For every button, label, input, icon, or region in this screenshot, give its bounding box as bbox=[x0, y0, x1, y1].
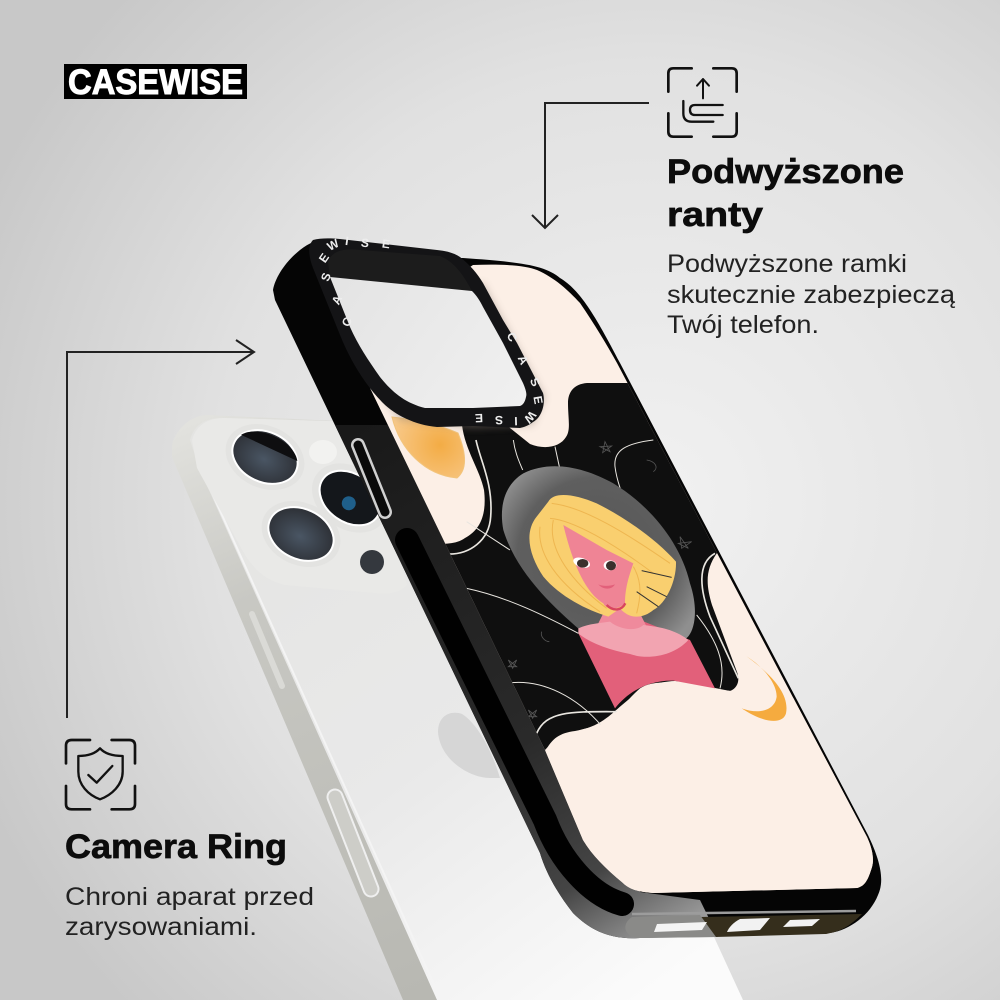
black phone case bbox=[273, 239, 881, 938]
ring lettering: A bbox=[329, 293, 345, 307]
ring lettering: I bbox=[344, 234, 350, 248]
ring shadow bbox=[385, 283, 545, 428]
hair strands bbox=[540, 503, 670, 613]
lower left case wall bbox=[335, 425, 718, 938]
illustrated figure bbox=[447, 440, 873, 907]
icon: shield with check bbox=[66, 740, 135, 809]
ring lettering: E bbox=[381, 237, 391, 251]
lens: bottom bbox=[251, 489, 351, 579]
ring lettering: E bbox=[316, 251, 332, 265]
eyes bbox=[573, 558, 590, 568]
hair bbox=[529, 495, 676, 617]
translucent bottom edge bbox=[625, 915, 716, 938]
ring lettering: S bbox=[360, 236, 370, 250]
text: camera ring description: Chroni aparat przed bbox=[65, 883, 314, 911]
space lines bbox=[447, 440, 738, 733]
volume button bbox=[358, 445, 385, 512]
heading: raised edges: ranty bbox=[667, 196, 763, 234]
port: usb bbox=[727, 918, 770, 932]
ring opening bbox=[330, 277, 526, 408]
ring lettering: W bbox=[325, 236, 342, 254]
lower side button bbox=[335, 797, 371, 889]
text: raised edges description bbox=[667, 250, 955, 339]
torso bbox=[578, 620, 715, 708]
lidar sensor bbox=[360, 550, 384, 574]
arrow: camera ring bbox=[67, 340, 254, 718]
cloud overlay bbox=[545, 682, 873, 907]
side button bbox=[252, 614, 282, 686]
heading: raised edges bbox=[667, 153, 904, 234]
flash bbox=[309, 440, 337, 464]
ring lettering: A bbox=[515, 353, 531, 367]
heading: raised edges: Podwyższone bbox=[667, 153, 904, 191]
text: raised edges description: skutecznie zabezpieczą bbox=[667, 281, 955, 309]
ring lettering: E bbox=[530, 395, 546, 405]
logo: CASEWISE bbox=[68, 63, 243, 102]
ring lettering: I bbox=[514, 414, 518, 428]
ring lettering: C bbox=[504, 330, 520, 344]
camera ring bbox=[309, 234, 546, 428]
back panel artwork bbox=[370, 264, 873, 893]
ring lettering bbox=[316, 234, 546, 428]
ring lettering: S bbox=[495, 413, 503, 427]
side grip channel bbox=[407, 540, 622, 904]
sun bbox=[392, 417, 465, 478]
ring lettering: W bbox=[521, 408, 539, 426]
dark hair lines bbox=[637, 571, 672, 607]
stars bbox=[508, 442, 692, 718]
mouth and collar bbox=[598, 584, 615, 589]
text: raised edges description: Twój telefon. bbox=[667, 311, 819, 339]
ring lettering: S bbox=[318, 271, 334, 283]
ring lettering: C bbox=[339, 315, 355, 329]
ring inner recess bbox=[328, 249, 472, 291]
face bbox=[563, 525, 633, 609]
port: mic bbox=[783, 919, 820, 927]
text: raised edges description: Podwyższone ramki bbox=[667, 250, 907, 278]
lens: top bbox=[215, 412, 315, 502]
port: speaker bbox=[654, 922, 707, 932]
camera plateau bbox=[192, 418, 407, 594]
ring lettering: S bbox=[527, 375, 543, 389]
crescent moon bbox=[742, 656, 787, 721]
bottom highlight bbox=[632, 911, 856, 914]
text: camera ring description bbox=[65, 883, 314, 941]
icon: raised edge layers bbox=[668, 68, 737, 137]
arrow: raised edges bbox=[532, 103, 649, 228]
chest dome bbox=[578, 622, 688, 657]
ring lettering: E bbox=[475, 411, 483, 425]
charging edge strip bbox=[700, 914, 862, 937]
white phone behind the case bbox=[172, 412, 743, 1000]
night sky blob bbox=[430, 383, 738, 752]
apple logo bbox=[438, 713, 500, 778]
helmet bbox=[502, 466, 695, 640]
lens: right bbox=[299, 449, 401, 547]
heading: camera ring: Camera Ring bbox=[65, 828, 287, 866]
neck bbox=[598, 610, 646, 630]
text: camera ring description: zarysowaniami. bbox=[65, 913, 257, 941]
